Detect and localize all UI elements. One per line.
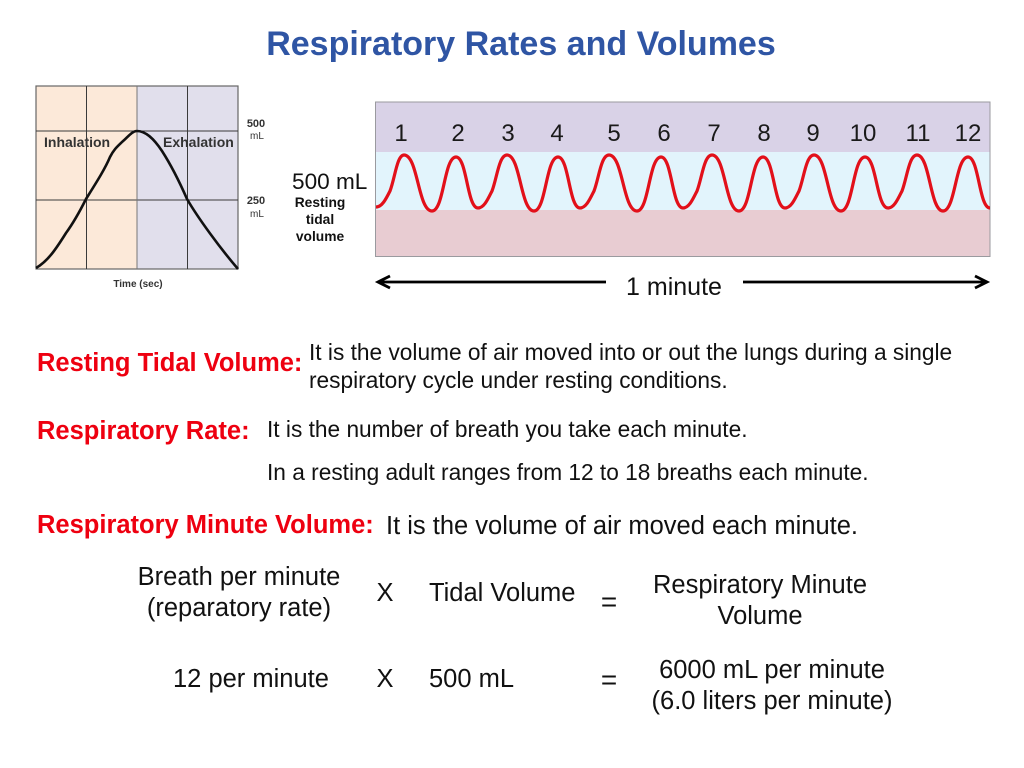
breath numbers: 7 — [707, 120, 721, 147]
formula: words — [138, 563, 867, 630]
arrow: left — [378, 276, 606, 288]
chart: single breath inhalation and exhalation — [36, 86, 265, 290]
axis label: time: Time (sec) — [113, 279, 163, 290]
curve: lung volume — [36, 131, 238, 269]
formula: words: Tidal Volume — [429, 579, 575, 607]
label: resting tidal volume: volume — [296, 229, 344, 244]
formula: worked example: = — [601, 664, 617, 695]
breath numbers — [394, 120, 981, 147]
axis label: 500 mL: mL — [250, 131, 264, 142]
breath numbers: 3 — [501, 120, 515, 147]
breath numbers: 11 — [906, 120, 930, 147]
formula: worked example: 6000 mL per minute — [659, 656, 885, 684]
axis label: 250 mL: mL — [250, 209, 264, 220]
formula: words: Volume — [717, 602, 803, 630]
formula: words: X — [376, 579, 394, 607]
breath numbers: 4 — [550, 120, 564, 147]
label: 500 mL: 500 mL — [292, 169, 367, 194]
breath numbers: 9 — [806, 120, 820, 147]
axis label: 250 mL: 250 — [247, 195, 265, 207]
formula: worked example: X — [376, 665, 394, 693]
formula: worked example: 12 per minute — [173, 665, 329, 693]
breath numbers: 8 — [757, 120, 771, 147]
heading: respiratory rate: Respiratory Rate: — [37, 417, 250, 445]
formula: words: Breath per minute — [138, 563, 340, 591]
label: inhalation: Inhalation — [44, 134, 110, 150]
arrow: right — [743, 276, 987, 288]
formula: worked example — [173, 656, 892, 715]
label: 1 minute: 1 minute — [626, 273, 722, 301]
breath numbers: 10 — [850, 120, 876, 147]
text: respiratory minute volume definition: It is the volume of air moved each minute. — [386, 512, 858, 540]
chart: twelve breaths per minute — [376, 102, 990, 256]
heading: respiratory minute volume: Respiratory Minute Volume: — [37, 511, 374, 539]
title: Respiratory Rates and Volumes — [266, 25, 776, 63]
axis label: 500 mL: 500 — [247, 118, 265, 130]
label: resting tidal volume: Resting — [295, 195, 345, 210]
text: resting tidal volume definition: It is the volume of air moved into or out the lungs during a single — [309, 339, 952, 365]
formula: words: = — [601, 586, 617, 617]
heading: resting tidal volume: Resting Tidal Volume: — [37, 349, 302, 377]
formula: words: (reparatory rate) — [147, 594, 331, 622]
breath numbers: 12 — [955, 120, 981, 147]
formula: worked example: (6.0 liters per minute) — [652, 687, 892, 715]
breath numbers: 2 — [451, 120, 465, 147]
breathing wave — [376, 155, 990, 211]
text: respiratory rate definition: It is the number of breath you take each minute. — [267, 416, 748, 442]
text: resting adult range: In a resting adult ranges from 12 to 18 breaths each minute. — [267, 459, 869, 485]
breath numbers: 5 — [607, 120, 621, 147]
label: resting tidal volume: tidal — [306, 212, 334, 227]
breath numbers: 1 — [394, 120, 408, 147]
breath numbers: 6 — [657, 120, 671, 147]
label: exhalation: Exhalation — [163, 134, 234, 150]
formula: worked example: 500 mL — [429, 665, 514, 693]
formula: words: Respiratory Minute — [653, 571, 867, 599]
text: resting tidal volume definition: respiratory cycle under resting conditions. — [309, 367, 728, 393]
